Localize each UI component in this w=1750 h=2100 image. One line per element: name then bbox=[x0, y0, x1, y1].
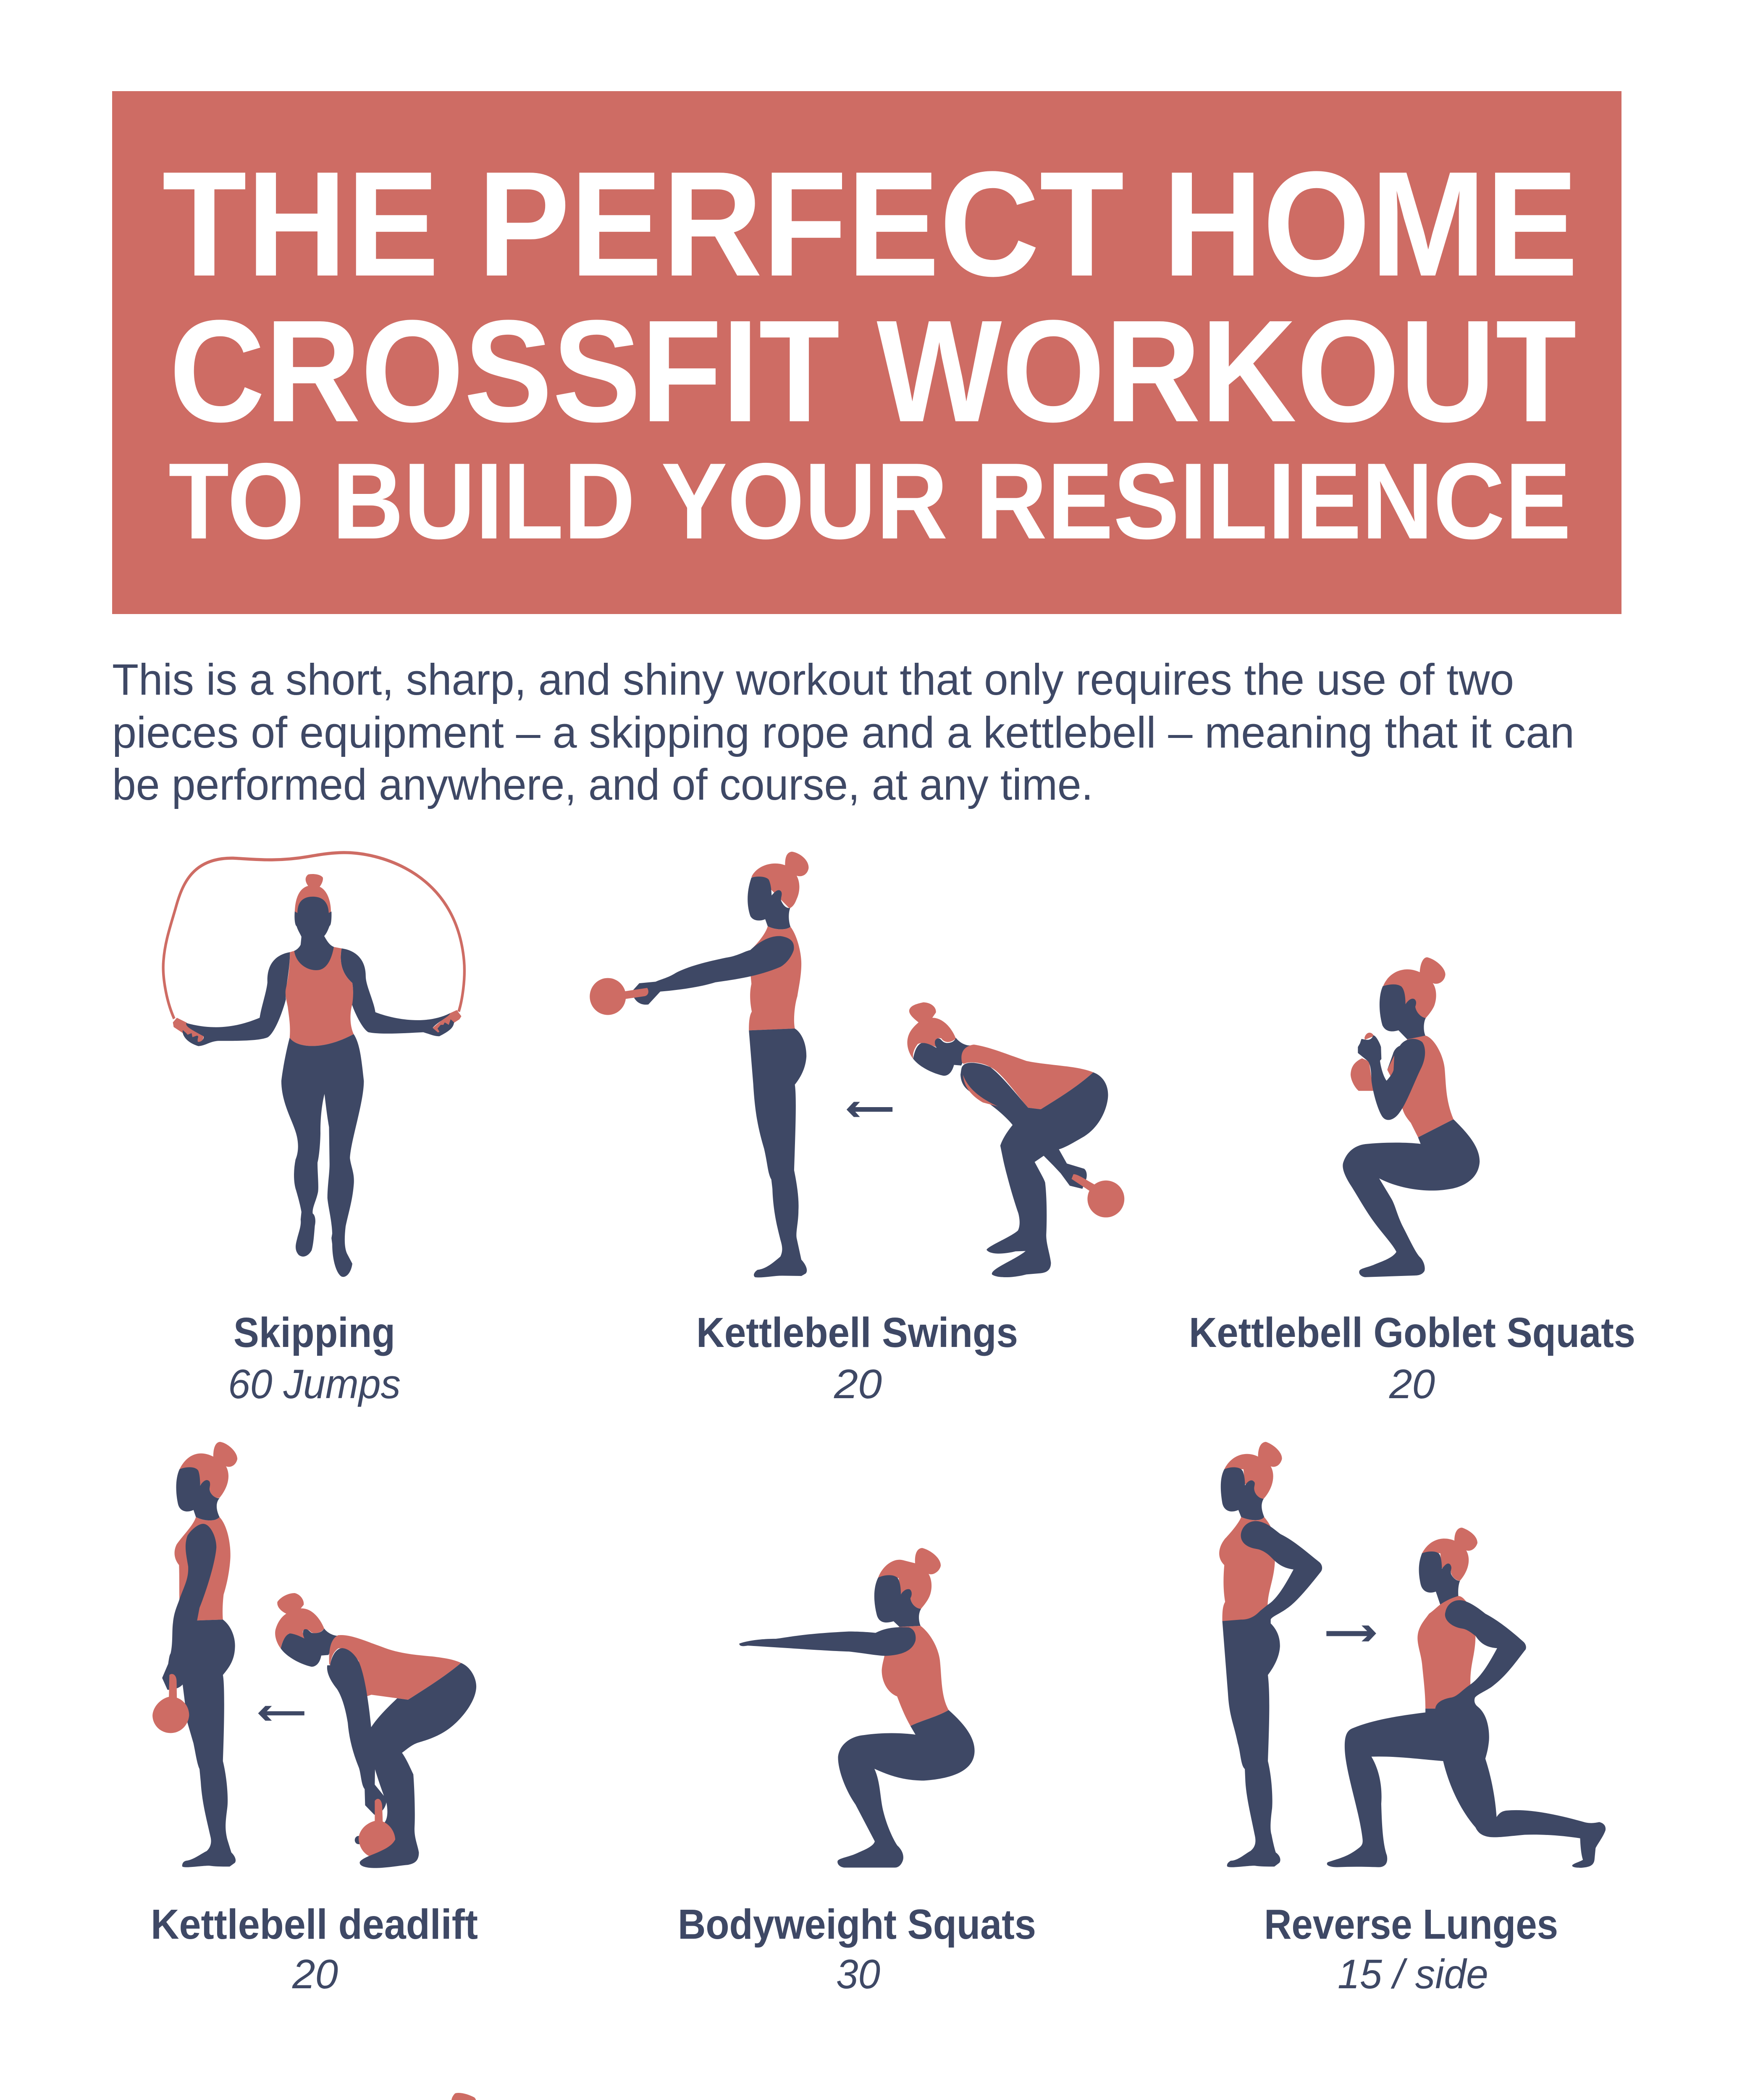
intro paragraph bbox=[112, 655, 1574, 809]
figure: kettlebell swings bbox=[590, 852, 1124, 1278]
intro paragraph: pieces of equipment – a skipping rope and a kettlebell – meaning that it can bbox=[112, 708, 1574, 757]
label: kettlebell swings bbox=[696, 1309, 1018, 1407]
label: kettlebell swings: 20 bbox=[834, 1361, 882, 1407]
label: reverse lunges: Reverse Lunges bbox=[1264, 1901, 1558, 1948]
title banner: THE PERFECT HOME bbox=[162, 141, 1578, 307]
label: kettlebell swings: Kettlebell Swings bbox=[696, 1309, 1018, 1356]
label: skipping bbox=[228, 1309, 401, 1407]
label: reverse lunges bbox=[1264, 1901, 1558, 1997]
figure: push-ups bbox=[145, 2093, 484, 2100]
title banner: TO BUILD YOUR RESILIENCE bbox=[168, 440, 1571, 562]
label: skipping: 60 Jumps bbox=[228, 1361, 401, 1407]
label: reverse lunges: 15 / side bbox=[1338, 1951, 1488, 1997]
label: bodyweight squats: 30 bbox=[836, 1951, 880, 1997]
label: kettlebell deadlift: Kettlebell deadlift bbox=[151, 1901, 478, 1948]
intro paragraph: This is a short, sharp, and shiny workout that only requires the use of two bbox=[112, 655, 1514, 704]
figure: skipping bbox=[163, 853, 464, 1277]
label: bodyweight squats bbox=[678, 1901, 1036, 1997]
figure: reverse lunges bbox=[1219, 1442, 1606, 1868]
label: kettlebell goblet squats: Kettlebell Goblet Squats bbox=[1189, 1309, 1635, 1356]
title banner bbox=[112, 91, 1621, 614]
label: kettlebell goblet squats: 20 bbox=[1389, 1361, 1435, 1407]
figure: bodyweight squats bbox=[739, 1548, 975, 1868]
label: skipping: Skipping bbox=[234, 1309, 395, 1356]
label: kettlebell goblet squats bbox=[1189, 1309, 1635, 1407]
label: kettlebell deadlift bbox=[151, 1901, 478, 1997]
label: kettlebell deadlift: 20 bbox=[292, 1951, 338, 1997]
figure: kettlebell deadlift bbox=[152, 1442, 476, 1868]
label: bodyweight squats: Bodyweight Squats bbox=[678, 1901, 1036, 1948]
figure: kettlebell goblet squats bbox=[1343, 957, 1480, 1277]
title banner: CROSSFIT WORKOUT bbox=[169, 290, 1577, 452]
intro paragraph: be performed anywhere, and of course, at any time. bbox=[112, 760, 1093, 809]
